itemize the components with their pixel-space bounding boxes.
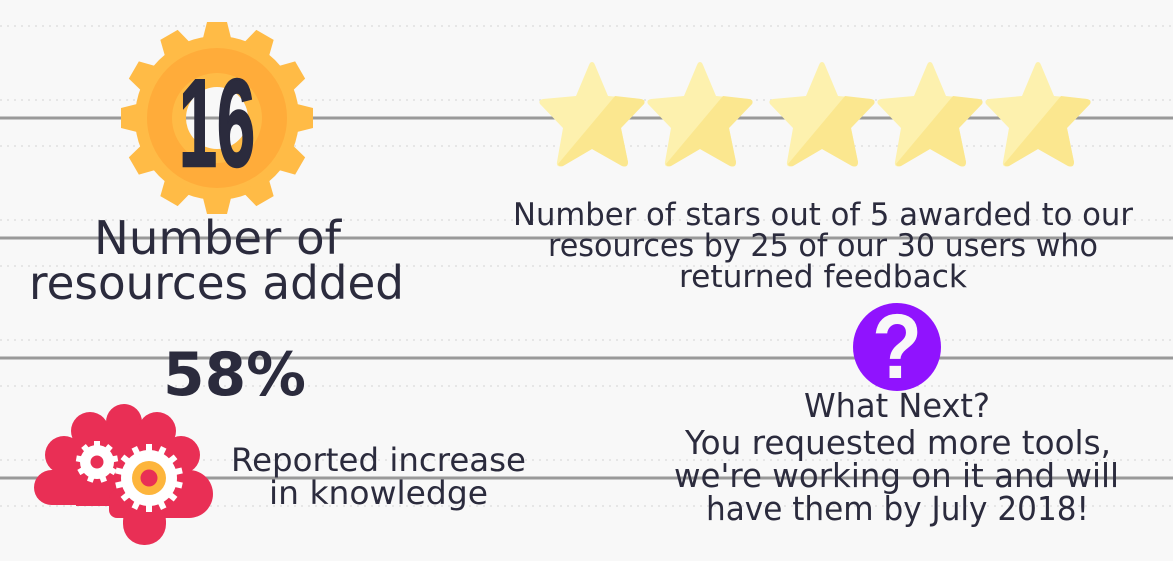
text: star rating description: resources by 25 of our 30 users who	[548, 228, 1098, 264]
heading: number of resources added: Number of	[94, 211, 343, 265]
text: star rating description	[513, 197, 1133, 295]
panel: what next	[674, 296, 1119, 528]
text: next steps: You requested more tools,	[684, 423, 1111, 462]
icon: five stars	[539, 62, 1091, 166]
text: next steps: we're working on it and will	[674, 456, 1119, 495]
text: next steps	[674, 423, 1119, 528]
panel: star rating	[513, 62, 1133, 295]
icon: question mark: ?	[872, 296, 922, 398]
heading: number of resources added	[29, 211, 404, 310]
heading: number of resources added: resources added	[29, 256, 404, 310]
large gear	[115, 444, 183, 512]
heading: what next: What Next?	[804, 386, 990, 425]
text: star rating description: returned feedback	[679, 259, 967, 295]
number: 58%: 58%	[163, 340, 306, 410]
text: reported increase in knowledge	[231, 441, 526, 512]
small gear	[76, 441, 118, 483]
text: star rating description: Number of stars out of 5 awarded to our	[513, 197, 1133, 233]
icon: brain with gears	[34, 404, 213, 545]
panel: increase in knowledge	[34, 340, 526, 545]
panel: resources added	[29, 22, 404, 310]
text: next steps: have them by July 2018!	[706, 489, 1089, 528]
text: reported increase in knowledge: Reported increase	[231, 441, 526, 479]
text: reported increase in knowledge: in knowledge	[269, 474, 488, 512]
number: 16: 16	[179, 55, 255, 193]
icon: question mark	[853, 296, 941, 398]
icon: gear badge	[121, 22, 313, 214]
